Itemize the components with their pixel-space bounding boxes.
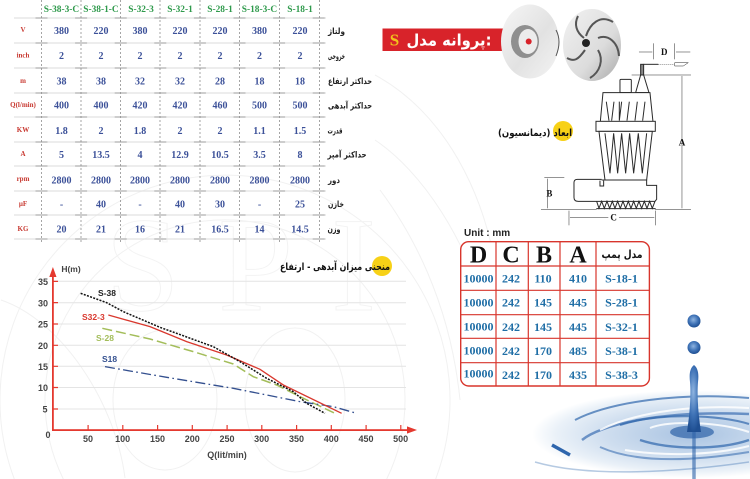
curve S-38	[81, 293, 325, 413]
Persian row labels: وزن	[328, 225, 340, 235]
dimensions heading	[498, 121, 573, 141]
Persian row labels: قدرت	[328, 126, 342, 136]
power row: 1.1	[253, 126, 266, 137]
dimension letters: B	[546, 189, 552, 199]
table rows: 435	[569, 368, 587, 382]
impeller front vanes	[563, 9, 621, 81]
table rows: 10000	[464, 320, 494, 334]
voltage row	[54, 26, 308, 37]
table rows: 242	[502, 368, 520, 382]
voltage row: 220	[212, 26, 228, 37]
Persian row labels: حداکثر آمپر	[327, 148, 366, 160]
dimension letters: C	[610, 213, 617, 223]
max flow row: 400	[94, 100, 108, 112]
weight row: 21	[175, 224, 185, 236]
power row: 2	[98, 126, 104, 137]
unit labels: A	[20, 150, 26, 158]
max flow row	[54, 100, 308, 112]
outlet row	[59, 51, 302, 62]
dimension letters: A	[679, 137, 686, 147]
table header: A	[569, 242, 587, 268]
table rows: 410	[569, 272, 587, 286]
voltage row: 380	[54, 26, 69, 37]
unit labels: Q(l/min)	[10, 101, 36, 109]
table rows: 170	[534, 344, 552, 358]
impeller model banner: S	[390, 30, 399, 50]
x axis labels: 450	[358, 434, 374, 444]
performance chart	[38, 264, 417, 460]
Persian row labels: خروجی	[328, 52, 345, 62]
table rows	[464, 272, 638, 382]
max head row	[56, 76, 305, 88]
watermark background: SPI	[105, 191, 414, 340]
y axis labels: 35	[38, 277, 48, 287]
outlet row: 2	[98, 51, 104, 62]
unit labels: m	[20, 77, 26, 85]
weight row: 20	[56, 224, 66, 236]
table rows: 242	[502, 320, 520, 334]
curve labels: S18	[102, 354, 117, 364]
table header: مدل پمپ	[602, 248, 642, 261]
max ampere row: 8	[298, 150, 302, 161]
y axis labels	[38, 264, 81, 440]
pump body	[574, 64, 657, 209]
watermark background	[0, 75, 500, 479]
table rows: 485	[569, 344, 587, 358]
outlet row: 2	[218, 51, 222, 62]
x axis labels: 50	[83, 434, 93, 444]
speed row: 2800	[250, 176, 270, 186]
outlet row: 2	[298, 51, 302, 62]
model headers: S-38-1-C	[83, 5, 119, 15]
x axis labels: 500	[393, 434, 408, 444]
table rows: S-38-3	[605, 368, 638, 382]
x axis labels: 150	[150, 434, 165, 444]
Persian row labels: دور	[327, 176, 341, 186]
capacitor row: -	[60, 200, 63, 210]
table grid	[14, 0, 326, 244]
weight row: 14.5	[291, 224, 309, 236]
table rows: 10000	[464, 272, 494, 286]
weight row: 21	[96, 224, 106, 236]
curve S18	[105, 367, 357, 413]
table rows: 145	[534, 296, 552, 310]
unit labels: KW	[17, 126, 29, 134]
voltage row: 380	[252, 26, 267, 37]
specification table	[10, 0, 372, 244]
max flow row: 460	[212, 100, 228, 112]
max head row: 32	[135, 76, 145, 88]
outlet row: 2	[178, 51, 182, 62]
table rows: S-28-1	[605, 296, 638, 310]
voltage row: 220	[94, 26, 108, 37]
curve labels: S-28	[96, 333, 114, 343]
unit labels	[10, 26, 36, 233]
capacitor row: 40	[96, 200, 106, 210]
Persian row labels: ولتاژ	[327, 27, 345, 37]
speed row: 2800	[52, 176, 72, 186]
dimension letters	[546, 47, 686, 223]
water splash illustration	[530, 365, 750, 479]
speed row: 2800	[170, 176, 190, 186]
model headers: S-32-3	[128, 5, 154, 15]
x axis labels: Q(lit/min)	[207, 450, 247, 460]
curve labels	[82, 288, 117, 364]
table rows: 445	[569, 296, 587, 310]
table rows: 10000	[464, 366, 494, 380]
table rows: 110	[534, 272, 552, 286]
dimensions heading: ابعاد (دیمانسیون)	[498, 128, 572, 139]
Persian row labels: حداکثر ارتفاع	[328, 77, 372, 87]
max head row: 28	[215, 76, 225, 88]
model headers: S-32-1	[167, 5, 193, 15]
unit labels: rpm	[17, 175, 30, 183]
dimensions table	[461, 242, 649, 386]
table rows: 145	[534, 320, 552, 334]
table rows: 242	[502, 344, 520, 358]
capacitor row: -	[258, 200, 261, 210]
chart heading	[280, 256, 392, 276]
table rows: S-18-1	[605, 272, 638, 286]
unit labels: inch	[17, 52, 30, 60]
max ampere row: 12.9	[171, 150, 189, 161]
weight row: 14	[254, 224, 264, 236]
impeller back disc	[501, 4, 559, 78]
voltage row: 220	[292, 26, 308, 37]
capacitor row: 30	[215, 200, 225, 210]
max head row: 18	[295, 76, 305, 88]
voltage row: 220	[172, 26, 188, 37]
power row: 1.5	[294, 126, 306, 137]
table rows: 10000	[464, 344, 494, 358]
table rows: 242	[502, 296, 520, 310]
speed row: 2800	[210, 176, 230, 186]
max ampere row	[59, 150, 302, 161]
y axis labels: 0	[45, 430, 51, 440]
y axis labels: 20	[38, 341, 48, 351]
curve S32-3	[108, 315, 342, 413]
dimension lines	[541, 43, 691, 225]
table rows: S-38-1	[605, 344, 638, 358]
model headers: S-18-1	[287, 5, 313, 15]
chart heading: منحنی میزان آبدهی - ارتفاع	[280, 260, 390, 273]
outlet row: 2	[59, 51, 64, 62]
speed row: 2800	[290, 176, 310, 186]
table header: B	[536, 242, 552, 268]
pump dimension drawing	[541, 43, 691, 225]
capacitor row	[60, 200, 305, 210]
y axis labels: 25	[38, 320, 48, 330]
weight row	[56, 224, 309, 236]
x axis labels: 250	[219, 434, 235, 444]
water drop upper	[688, 314, 700, 328]
unit labels: V	[20, 26, 26, 34]
table rows: 10000	[464, 296, 494, 310]
outlet row: 2	[257, 51, 262, 62]
outlet row: 2	[138, 51, 142, 62]
table rows: 242	[502, 272, 520, 286]
unit note: Unit : mm	[464, 228, 510, 239]
table rows: S-32-1	[605, 320, 638, 334]
max head row: 18	[254, 76, 264, 88]
weight row: 16	[135, 224, 145, 236]
curve labels: S32-3	[82, 312, 105, 322]
model headers	[44, 5, 313, 15]
table rows: 445	[569, 320, 587, 334]
capacitor row: -	[138, 200, 142, 210]
capacitor row: 40	[175, 200, 185, 210]
impeller model banner	[382, 28, 504, 51]
max flow row: 420	[132, 100, 148, 112]
curve S-28	[102, 328, 335, 413]
x axis labels: 400	[324, 434, 339, 444]
y axis labels: 10	[38, 383, 48, 393]
x axis labels	[83, 434, 408, 460]
max ampere row: 3.5	[253, 150, 266, 161]
voltage row: 380	[132, 26, 148, 37]
max flow row: 500	[292, 100, 308, 112]
x axis labels: 200	[185, 434, 200, 444]
max flow row: 420	[172, 100, 188, 112]
Persian row labels: خازن	[328, 200, 344, 210]
max head row: 38	[96, 76, 106, 88]
power row: 1.8	[134, 126, 146, 137]
max head row: 32	[175, 76, 185, 88]
Persian row labels	[327, 27, 372, 235]
table header: D	[470, 242, 487, 268]
max flow row: 500	[252, 100, 267, 112]
power row	[55, 126, 306, 137]
x axis labels: 100	[115, 434, 130, 444]
speed row: 2800	[91, 176, 111, 186]
dimension letters: D	[661, 47, 668, 57]
power row: 1.8	[55, 126, 68, 137]
table header	[470, 242, 642, 268]
table rows: 170	[534, 368, 552, 382]
curve labels: S-38	[98, 288, 116, 298]
speed row: 2800	[130, 176, 150, 186]
impeller model banner: پروانه مدل:	[406, 30, 492, 50]
max ampere row: 5	[59, 150, 64, 161]
y axis labels: 15	[38, 362, 48, 372]
x axis labels: 350	[289, 434, 304, 444]
table header: C	[502, 242, 520, 268]
max flow row: 400	[54, 100, 69, 112]
speed row	[52, 176, 310, 186]
unit labels: KG	[18, 225, 29, 233]
gridlines	[53, 281, 406, 409]
water drop lower	[688, 341, 700, 354]
max ampere row: 4	[138, 150, 142, 161]
chart axes	[49, 267, 417, 434]
weight row: 16.5	[211, 224, 229, 236]
model headers: S-38-3-C	[44, 5, 79, 15]
y axis labels: 5	[42, 404, 48, 414]
y axis labels: H(m)	[61, 264, 81, 274]
model headers: S-28-1	[207, 5, 233, 15]
max head row: 38	[56, 76, 66, 88]
max ampere row: 13.5	[92, 150, 110, 161]
unit labels: µF	[19, 200, 27, 208]
power row: 2	[178, 126, 182, 137]
capacitor row: 25	[295, 200, 305, 210]
Persian row labels: حداکثر آبدهی	[328, 100, 372, 112]
y axis labels: 30	[38, 298, 48, 308]
max ampere row: 10.5	[211, 150, 229, 161]
power row: 2	[218, 126, 222, 137]
x axis labels: 300	[254, 434, 269, 444]
model headers: S-18-3-C	[242, 5, 277, 15]
